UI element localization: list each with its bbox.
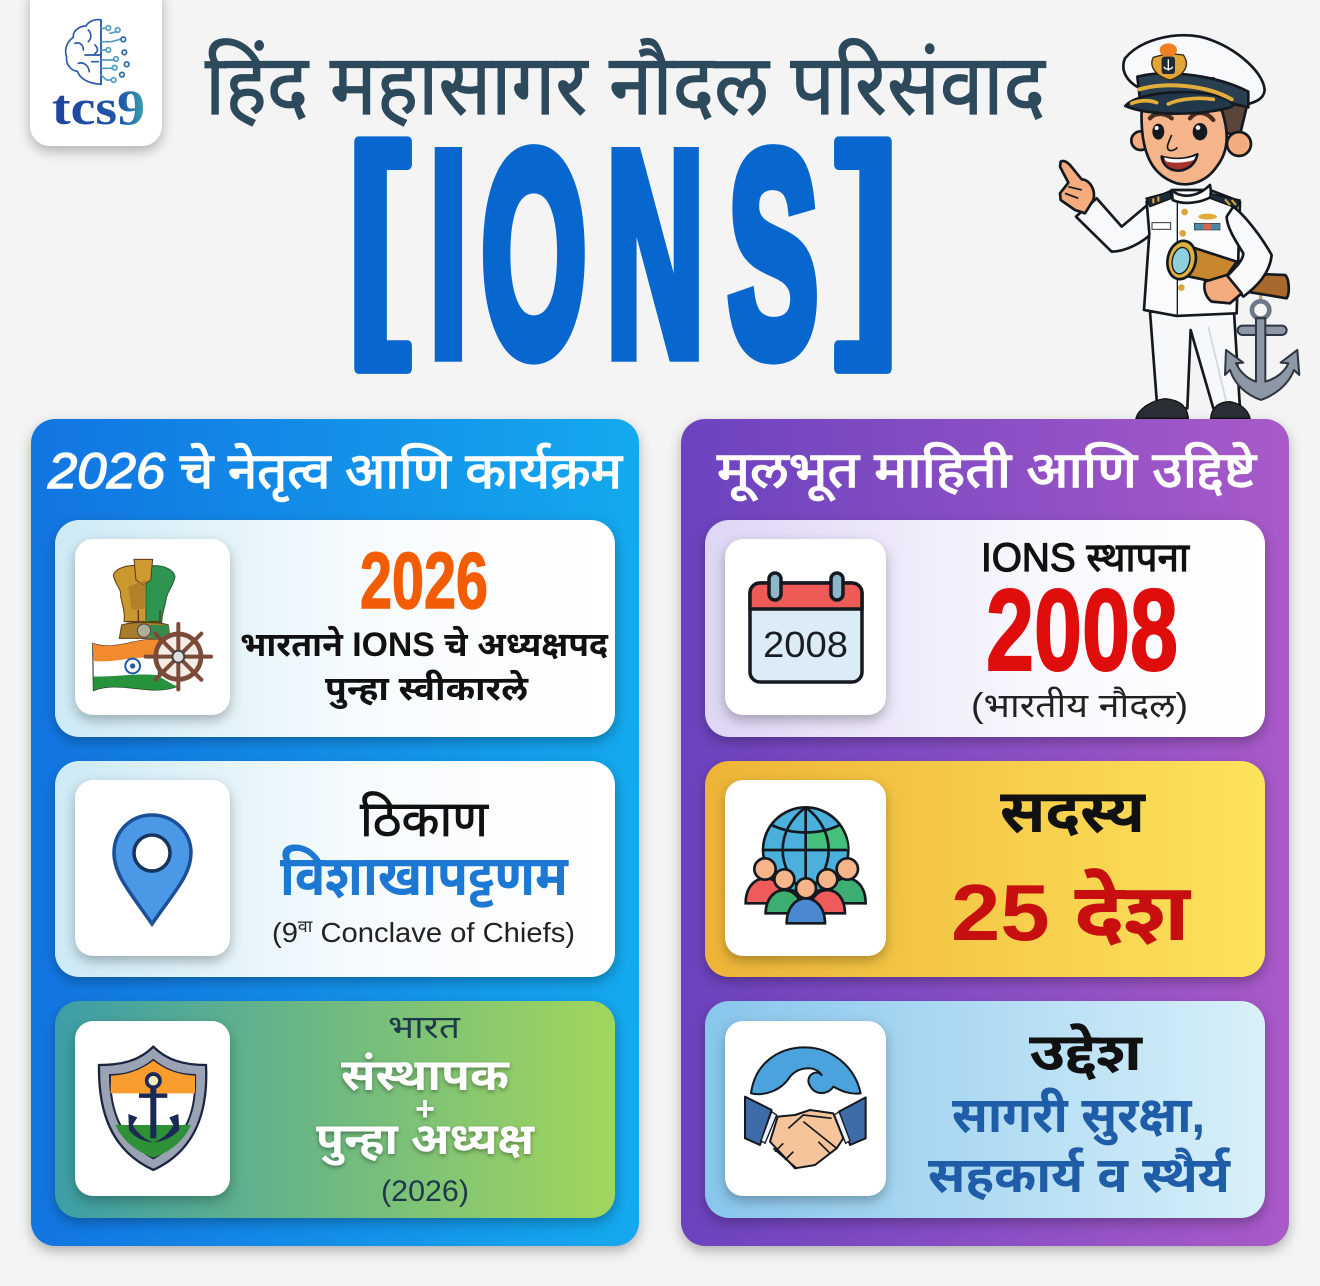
panel heading: मूलभूत माहिती आणि उद्दिष्टे bbox=[717, 442, 1257, 502]
anchor bbox=[1225, 292, 1299, 400]
gripping hand bbox=[1204, 275, 1242, 303]
card: founded 2008 bbox=[705, 520, 1265, 737]
logo wordmark: tcs9 bbox=[52, 79, 145, 135]
text: maritime security, cooperation and stability bbox=[928, 1087, 1231, 1203]
icon: calendar 2008: 2008 bbox=[763, 624, 848, 665]
text: maritime security, cooperation and stability: सहकार्य व स्थैर्य bbox=[928, 1147, 1231, 1203]
card: location bbox=[55, 761, 615, 977]
text: maritime security, cooperation and stability: सागरी सुरक्षा, bbox=[952, 1087, 1205, 1147]
icon: calendar 2008 bbox=[750, 573, 862, 682]
icon: national emblem, flag and ship wheel bbox=[93, 559, 211, 691]
title: Marathi heading: हिंद महासागर नौदल परिसंवाद bbox=[205, 38, 1046, 132]
text: founder + chairman again: संस्थापक bbox=[341, 1051, 511, 1100]
text: objective: उद्देश bbox=[1029, 1023, 1144, 1082]
illustration: naval officer cartoon bbox=[1060, 35, 1299, 418]
text: founder + chairman again: पुन्हा अध्यक्ष bbox=[316, 1115, 535, 1166]
text: 25 countries: 25 देश bbox=[951, 867, 1192, 957]
year 2026: 2026 bbox=[360, 536, 488, 625]
card: objective bbox=[705, 1001, 1265, 1218]
text: India resumed chairmanship bbox=[240, 625, 609, 710]
epaulettes bbox=[1146, 192, 1240, 208]
text: founder + chairman again bbox=[316, 1051, 535, 1166]
text: India: भारत bbox=[388, 1009, 461, 1045]
text: founder + chairman again: + bbox=[415, 1090, 435, 1128]
year 2008: 2008 bbox=[986, 565, 1178, 695]
jacket arm left bbox=[1076, 198, 1153, 252]
text: India resumed chairmanship: भारताने IONS चे अध्यक्षपद bbox=[240, 625, 609, 664]
spyglass bbox=[1173, 243, 1237, 283]
text: IONS founded: IONS स्थापना bbox=[981, 536, 1190, 580]
spyglass tail bbox=[1240, 273, 1289, 298]
icon: brain circuit bbox=[66, 20, 129, 84]
jacket body bbox=[1144, 190, 1240, 316]
jacket arm right bbox=[1227, 207, 1272, 297]
ears and hair bbox=[1131, 131, 1150, 150]
panel: 2026 leadership and events bbox=[31, 419, 639, 1246]
logo: tcs9 bbox=[30, 0, 162, 146]
collar bbox=[1172, 185, 1212, 203]
text: Conclave of Chiefs: (9 bbox=[272, 917, 297, 948]
title: IONS in brackets: ] bbox=[836, 99, 898, 370]
title: IONS in brackets: [ bbox=[348, 99, 410, 370]
legs bbox=[1150, 312, 1240, 408]
icon: globe with people bbox=[746, 807, 866, 923]
card: India founder bbox=[55, 1001, 615, 1218]
text: Conclave of Chiefs: Conclave of Chiefs) bbox=[312, 917, 575, 948]
icon: location pin bbox=[114, 815, 191, 924]
pointing hand bbox=[1060, 161, 1094, 213]
card: 2026 chairmanship bbox=[55, 520, 615, 737]
face bbox=[1142, 110, 1227, 184]
label: address: ठिकाण bbox=[360, 791, 489, 847]
shoes bbox=[1136, 399, 1250, 418]
icon: anchor shield bbox=[99, 1047, 206, 1170]
cap bbox=[1123, 35, 1265, 104]
text: members: सदस्य bbox=[1000, 778, 1146, 845]
card: members bbox=[705, 761, 1265, 977]
text: Visakhapatnam: विशाखापट्टणम bbox=[280, 844, 569, 908]
text: India resumed chairmanship: पुन्हा स्वीकारले bbox=[325, 669, 529, 710]
text: Conclave of Chiefs: वा bbox=[298, 917, 313, 936]
panel heading: 2026 चे नेतृत्व आणि कार्यक्रम bbox=[47, 443, 623, 502]
title: IONS in brackets: IONS bbox=[430, 92, 818, 415]
panel: basic information and objectives bbox=[681, 419, 1289, 1246]
text: Indian Navy: (भारतीय नौदल) bbox=[971, 687, 1188, 725]
cap badge bbox=[1152, 53, 1186, 80]
buttons and badges bbox=[1152, 209, 1220, 291]
icon: wave and handshake bbox=[745, 1047, 866, 1168]
text: (2026): (2026) bbox=[381, 1175, 469, 1208]
